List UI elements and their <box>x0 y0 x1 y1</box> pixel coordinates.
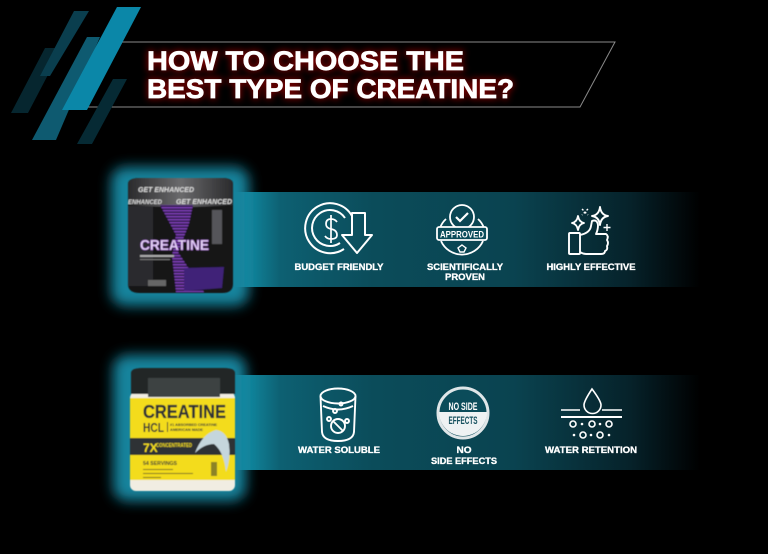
product: creatine tub <box>128 178 233 293</box>
product: creatine HCL tub: 7X <box>143 441 158 455</box>
text: water retention: WATER RETENTION <box>545 445 637 455</box>
icon: thumbs up with sparkles <box>569 207 610 254</box>
text: water soluble: WATER SOLUBLE <box>298 445 380 455</box>
product: creatine tub: ENHANCED <box>128 200 163 206</box>
icon: no side effects seal: EFFECTS <box>448 415 478 427</box>
glow: first product <box>111 167 249 306</box>
product: creatine HCL tub <box>130 368 235 491</box>
title: BEST TYPE OF CREATINE? <box>147 74 514 104</box>
title <box>147 46 514 104</box>
panel: creatine HCL bar <box>234 375 700 470</box>
panel: creatine monohydrate bar <box>234 192 700 287</box>
text: highly effective: HIGHLY EFFECTIVE <box>546 262 636 272</box>
title: BEST TYPE OF CREATINE? <box>147 74 514 104</box>
glow: second product <box>113 355 246 501</box>
icon: water retention <box>561 389 622 438</box>
icon: glass with tablet <box>320 388 356 441</box>
decorative slashes <box>11 7 141 144</box>
title frame <box>87 42 615 107</box>
text: no side effects: SIDE EFFECTS <box>431 456 497 466</box>
icon: budget friendly <box>305 203 372 253</box>
icon: no side effects seal: NO SIDE <box>448 401 478 413</box>
product: creatine tub: CREATINE <box>140 238 209 254</box>
product: creatine HCL tub: #1 ABSORBED CREATINE <box>170 423 218 427</box>
product: creatine HCL tub: CONCENTRATED <box>156 443 192 449</box>
icon: no side effects seal <box>438 388 488 438</box>
text: scientifically proven: PROVEN <box>445 272 485 282</box>
product: creatine tub: GET ENHANCED <box>176 199 232 206</box>
product: creatine HCL tub: CREATINE <box>143 402 226 422</box>
title: HOW TO CHOOSE THE <box>147 46 464 76</box>
title: HOW TO CHOOSE THE <box>147 46 464 76</box>
text: budget friendly: BUDGET FRIENDLY <box>294 262 384 272</box>
text: no side effects: NO <box>456 445 472 455</box>
product: creatine HCL tub: AMERICAN MADE <box>170 428 204 432</box>
text: scientifically proven: SCIENTIFICALLY <box>427 262 503 272</box>
icon: approved badge <box>437 205 487 255</box>
text: no side effects <box>431 445 497 466</box>
product: creatine tub: GET ENHANCED <box>138 187 194 194</box>
product: creatine HCL tub: 54 SERVINGS <box>143 461 177 467</box>
text: scientifically proven <box>427 262 503 282</box>
icon: approved badge: APPROVED <box>440 230 484 240</box>
product: creatine HCL tub: HCL <box>143 420 164 435</box>
